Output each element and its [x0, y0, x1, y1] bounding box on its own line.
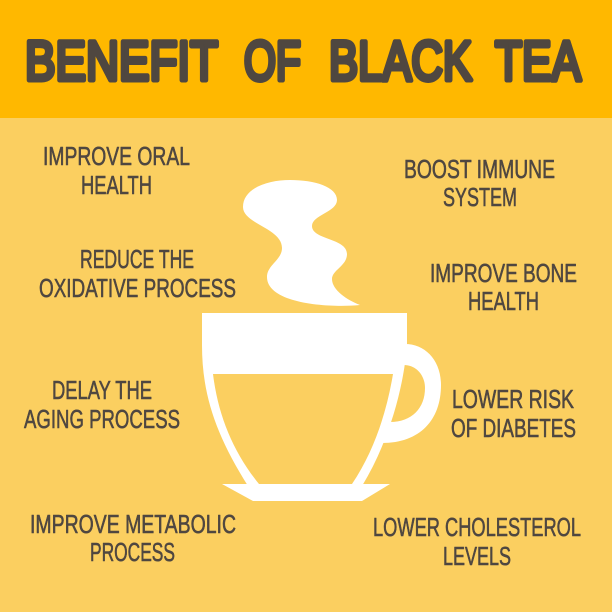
- title: [25, 29, 582, 92]
- benefit: boost immune system: [404, 154, 555, 212]
- left benefits: [24, 141, 236, 567]
- benefit: lower risk of diabetes: LOWER RISK: [452, 384, 574, 414]
- benefit: delay the aging process: AGING PROCESS: [24, 404, 180, 434]
- title: BLACK: [329, 29, 472, 92]
- icon: tea cup: [202, 313, 441, 501]
- benefit: boost immune system: BOOST IMMUNE: [404, 154, 555, 184]
- benefit: improve bone health: [430, 258, 577, 316]
- benefit: reduce the oxidative process: [39, 244, 236, 303]
- benefit: delay the aging process: [24, 375, 180, 434]
- benefit: reduce the oxidative process: REDUCE THE: [80, 244, 194, 274]
- benefit: improve bone health: HEALTH: [468, 286, 539, 316]
- benefit: boost immune system: SYSTEM: [443, 182, 517, 212]
- icon: steam: [243, 180, 360, 306]
- cup body: [202, 313, 407, 486]
- benefit: lower cholesterol levels: LEVELS: [443, 541, 511, 571]
- benefit: reduce the oxidative process: OXIDATIVE PROCESS: [39, 273, 236, 303]
- title: OF: [244, 29, 301, 92]
- cup handle: [382, 344, 441, 443]
- title: BENEFIT: [25, 29, 218, 92]
- benefit: improve metabolic process: IMPROVE METABOLIC: [30, 509, 236, 539]
- benefit: improve oral health: IMPROVE ORAL: [43, 141, 190, 171]
- benefit: improve oral health: [43, 141, 190, 200]
- benefit: lower risk of diabetes: [451, 384, 576, 443]
- right benefits: [373, 154, 581, 571]
- saucer: [222, 484, 390, 501]
- benefit: lower cholesterol levels: [373, 512, 581, 571]
- header banner: [0, 0, 612, 118]
- benefit: delay the aging process: DELAY THE: [52, 375, 152, 405]
- title: TEA: [495, 29, 582, 92]
- benefit: improve metabolic process: PROCESS: [90, 537, 175, 567]
- benefit: improve oral health: HEALTH: [81, 170, 152, 200]
- benefit: improve metabolic process: [30, 509, 236, 567]
